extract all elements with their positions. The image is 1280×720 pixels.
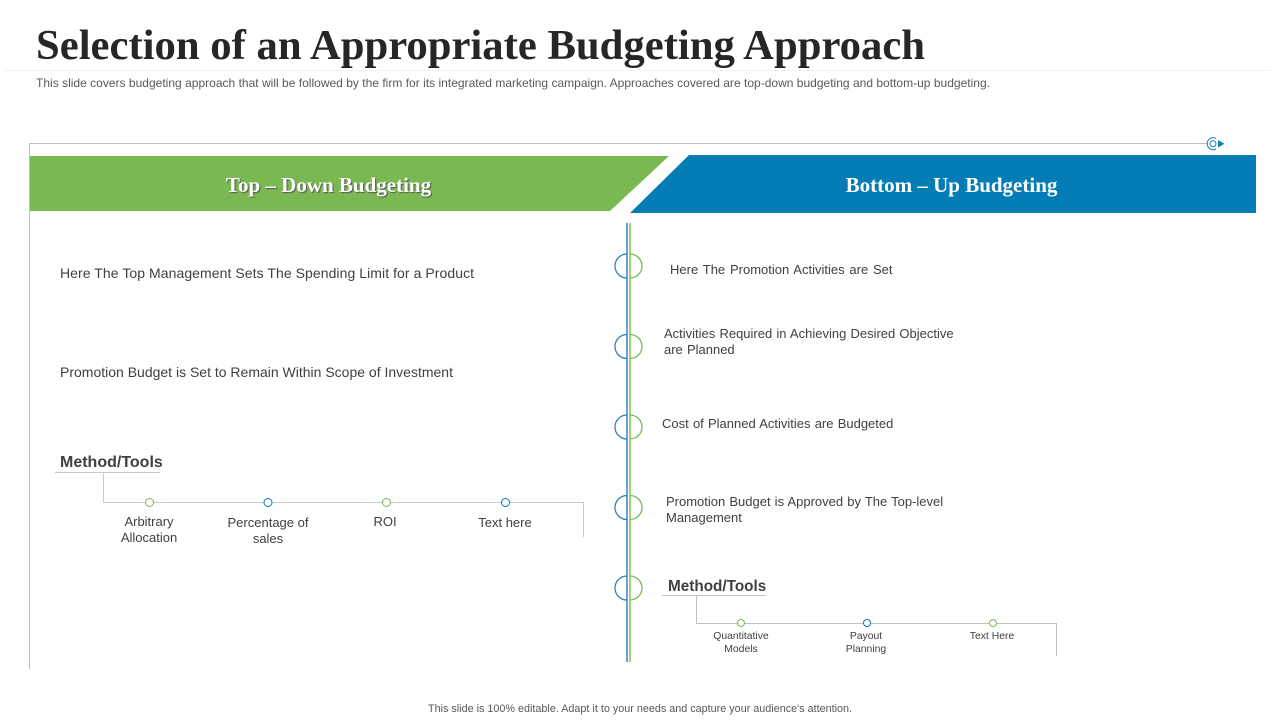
tool: payout planning: Payout [850,631,882,642]
bottom-up step 2 [664,326,954,357]
heading: method/tools right: Method/Tools [668,578,766,595]
tool: percentage of sales [228,515,308,546]
bottom-up step 3: Cost of Planned Activities are Budgeted [662,416,893,431]
bottom-up step 4 [666,494,943,525]
tool: payout planning [846,631,886,655]
tool: payout planning: Planning [846,644,886,655]
bottom-up step 2: are Planned [664,342,735,357]
tool: ROI: ROI [373,514,397,529]
tool: percentage of sales: Percentage of [228,515,308,530]
tool: quantitative models: Models [724,644,758,655]
top-down statement 1: Here The Top Management Sets The Spending Limit for a Product [60,265,474,281]
tool: text here: Text here [478,515,532,530]
tool: quantitative models [713,631,769,655]
tool: quantitative models: Quantitative [713,631,769,642]
tool: arbitrary allocation: Allocation [121,530,177,545]
heading: top-down budgeting: Top – Down Budgeting [226,173,431,197]
tool: arbitrary allocation [121,514,177,545]
bottom-up step 4: Promotion Budget is Approved by The Top-level [666,494,943,509]
top-down statement 2: Promotion Budget is Set to Remain Within Scope of Investment [60,364,453,380]
subtitle: This slide covers budgeting approach that will be followed by the firm for its integrated marketing campaign. Approaches covered are top-down budgeting and bottom-up budgeting. [36,76,990,90]
tool: text here right: Text Here [970,631,1014,642]
heading: bottom-up budgeting: Bottom – Up Budgeting [846,173,1057,197]
bottom-up step 2: Activities Required in Achieving Desired Objective [664,326,954,341]
tool: percentage of sales: sales [253,531,283,546]
footer note: This slide is 100% editable. Adapt it to your needs and capture your audience's attention. [428,703,852,715]
bottom-up step 1: Here The Promotion Activities are Set [670,262,893,277]
title: Selection of an Appropriate Budgeting Approach [36,22,925,69]
tool: arbitrary allocation: Arbitrary [124,514,174,529]
bottom-up step 4: Management [666,510,742,525]
heading: method/tools left: Method/Tools [60,454,163,471]
